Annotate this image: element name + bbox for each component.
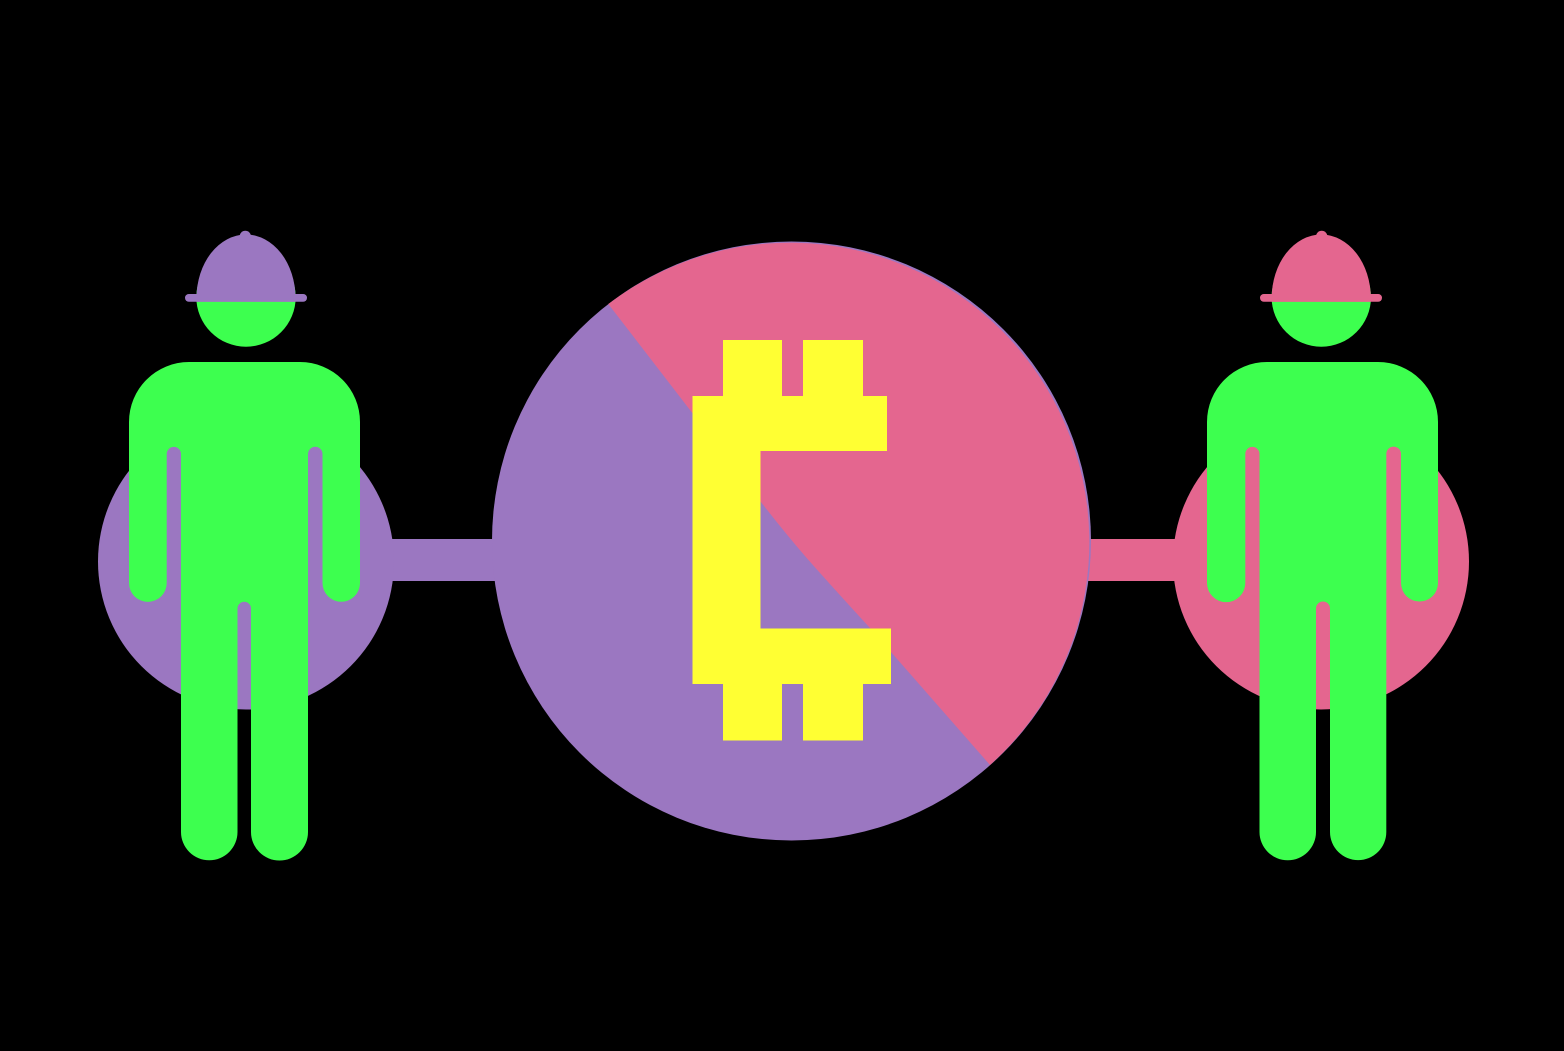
helmet brim bbox=[185, 294, 307, 302]
right connector bar bbox=[1082, 539, 1182, 581]
right miner body bbox=[1207, 362, 1438, 860]
icon: bitcoin symbol bbox=[692, 340, 891, 740]
coin pink share bbox=[608, 243, 1089, 765]
helmet dome bbox=[196, 235, 296, 302]
right miner pink circle bbox=[1173, 414, 1469, 710]
left miner face bbox=[196, 247, 296, 347]
left miner helmet bbox=[185, 231, 307, 302]
helmet brim bbox=[1260, 294, 1382, 302]
central coin bbox=[492, 242, 1091, 840]
helmet knob bbox=[1316, 231, 1327, 242]
left miner body bbox=[129, 362, 360, 860]
right miner bbox=[1173, 231, 1469, 860]
left miner purple circle bbox=[98, 414, 394, 710]
coin purple share bbox=[492, 242, 1091, 840]
left connector bar bbox=[385, 539, 500, 581]
helmet knob bbox=[240, 231, 251, 242]
right miner helmet bbox=[1260, 231, 1382, 302]
left miner bbox=[98, 231, 394, 860]
helmet dome bbox=[1272, 234, 1371, 302]
right miner face bbox=[1272, 247, 1371, 347]
